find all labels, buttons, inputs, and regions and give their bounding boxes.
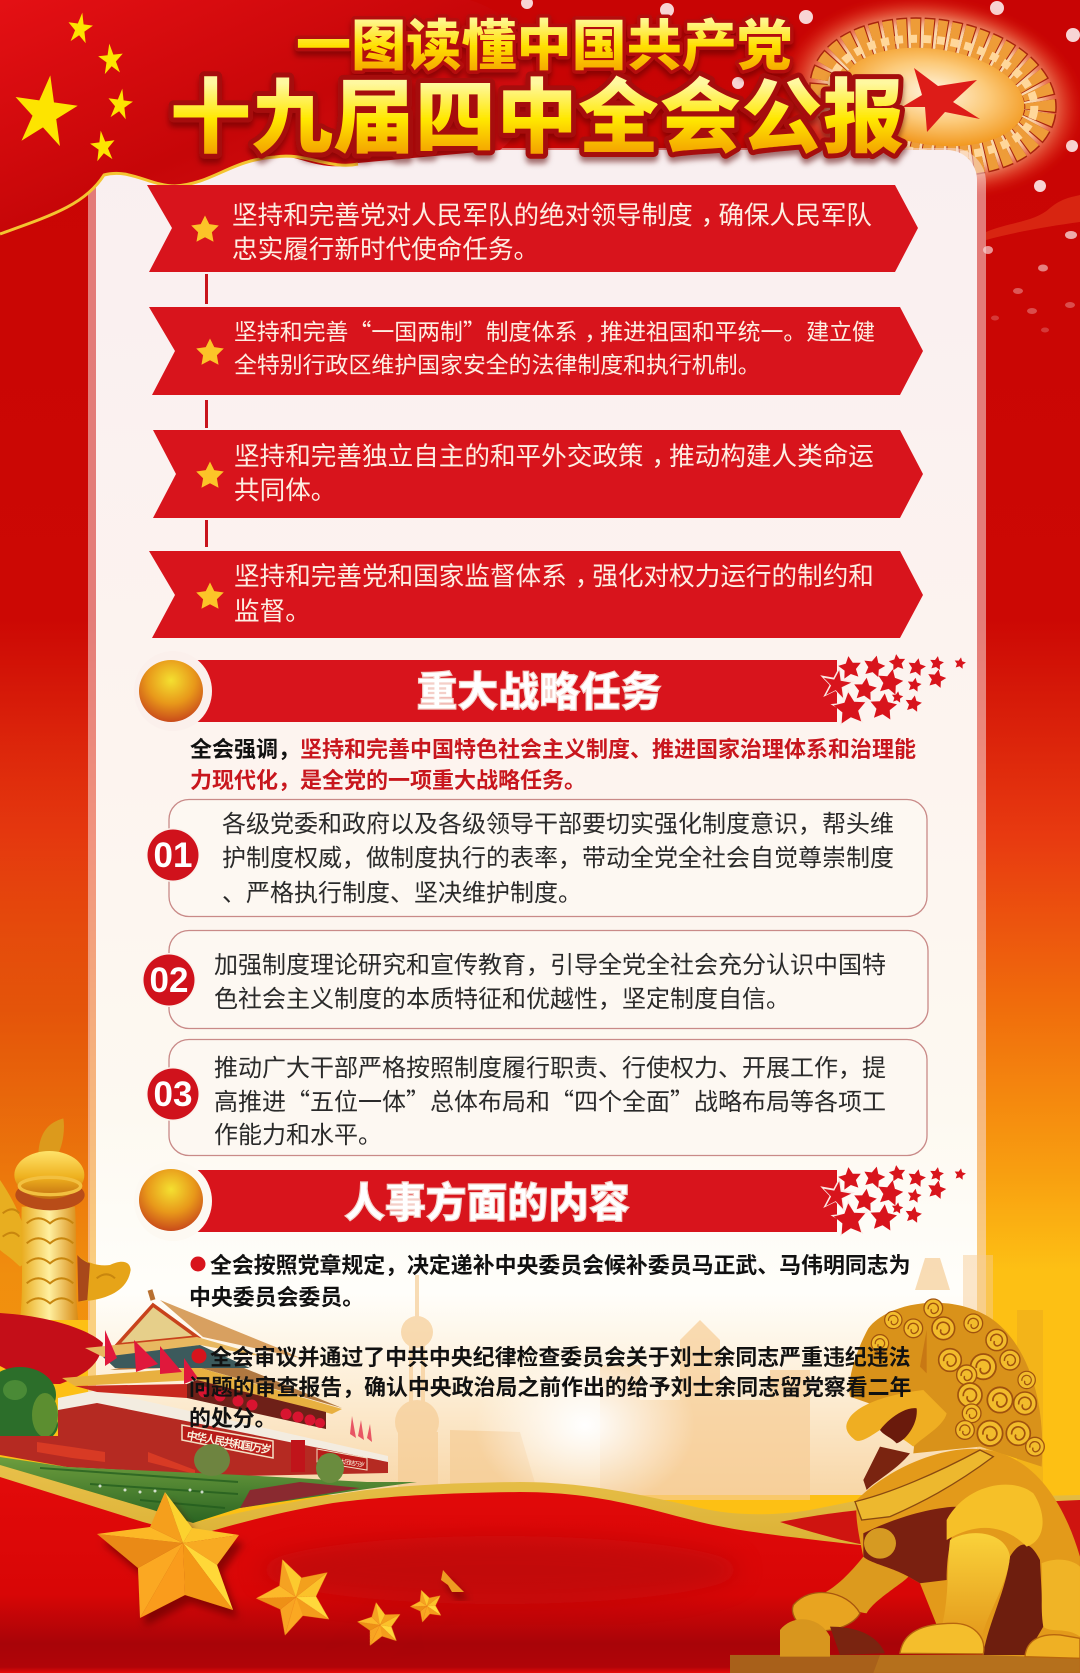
card 02: 02 <box>150 961 188 1000</box>
trees <box>0 1367 58 1447</box>
title line 2: 十九届四中全会公报 <box>170 74 904 164</box>
intro text: 全会强调，坚持和完善中国特色社会主义制度、推进国家治理体系和治理能 <box>190 737 916 762</box>
red drape <box>0 1313 103 1384</box>
ribbon 2: 坚持和完善“一国两制”制度体系 ，推进祖国和平统一。建立健 <box>234 313 875 347</box>
card 02: 色社会主义制度的本质特征和优越性，坚定制度自信。 <box>214 986 790 1013</box>
section header: personnel <box>134 1161 967 1241</box>
card 01: 、严格执行制度、坚决维护制度。 <box>222 880 582 907</box>
bullet paragraph 1: 全会按照党章规定，决定递补中央委员会候补委员马正武、马伟明同志为 <box>210 1253 911 1278</box>
hedge and flowers <box>0 1444 417 1523</box>
emblem: gold ring with red star <box>771 0 1080 215</box>
card 01: 护制度权威，做制度执行的表率，带动全党全社会自觉尊崇制度 <box>222 845 894 872</box>
stone lion <box>730 1299 1080 1673</box>
ribbon 3 <box>153 430 923 518</box>
card 03 <box>146 1040 927 1156</box>
ribbon 4: 监督。 <box>234 597 311 626</box>
connector lines <box>205 274 208 547</box>
left side shading <box>0 700 90 1320</box>
panel: main white card <box>88 148 986 1495</box>
ribbon 2: 全特别行政区维护国家安全的法律制度和执行机制。 <box>234 352 760 378</box>
ribbon 1: 坚持和完善党对人民军队的绝对领导制度 ，确保人民军队 <box>232 201 872 230</box>
ribbon 1: 忠实履行新时代使命任务。 <box>232 235 539 264</box>
sun glow <box>475 1340 695 1510</box>
tiananmen gate <box>0 1290 388 1476</box>
intro text <box>190 737 916 793</box>
tiananmen gate: 世界人民大团结万岁 <box>320 1454 365 1469</box>
card 03: 推动广大干部严格按照制度履行职责、行使权力、开展工作，提 <box>214 1055 886 1082</box>
ribbon 2 <box>149 307 923 395</box>
card 03: 03 <box>154 1075 192 1114</box>
ribbon 3: 坚持和完善独立自主的和平外交政策 ，推动构建人类命运 <box>234 442 874 471</box>
skyline silhouette <box>395 1255 1043 1515</box>
section header: major strategic task <box>134 651 967 731</box>
ribbon 4: 坚持和完善党和国家监督体系 ，强化对权力运行的制约和 <box>234 562 874 591</box>
card 03: 高推进“五位一体”总体布局和“四个全面”战略布局等各项工 <box>214 1082 886 1117</box>
section header: major strategic task: 重大战略任务 <box>417 669 661 715</box>
bullet paragraph 1 <box>189 1253 911 1310</box>
card 02 <box>142 930 928 1028</box>
bullet paragraph 2 <box>189 1345 912 1431</box>
huabiao column <box>0 1118 131 1320</box>
card 03: 作能力和水平。 <box>214 1122 382 1149</box>
gold stars <box>97 1492 464 1647</box>
decorative bokeh dots <box>521 0 1080 332</box>
bullet paragraph 2: 全会审议并通过了中共中央纪律检查委员会关于刘士余同志严重违纪违法 <box>210 1345 911 1370</box>
title line 1: 一图读懂中国共产党 <box>296 15 792 77</box>
card 01: 各级党委和政府以及各级领导干部要切实强化制度意识，帮头维 <box>222 811 894 838</box>
bullet paragraph 1: 中央委员会委员。 <box>189 1285 364 1310</box>
right side cloud <box>986 195 1080 240</box>
bullet paragraph 2: 的处分。 <box>189 1406 277 1431</box>
card 01 <box>146 800 927 916</box>
tiananmen gate: 中华人民共和国万岁 <box>185 1428 273 1457</box>
section header: personnel: 人事方面的内容 <box>344 1180 630 1226</box>
intro text: 力现代化，是全党的一项重大战略任务。 <box>190 768 586 793</box>
card 02: 加强制度理论研究和宣传教育，引导全党全社会充分认识中国特 <box>214 952 886 979</box>
bottom red wave <box>0 1465 1080 1673</box>
bullet paragraph 2: 问题的审查报告，确认中央政治局之前作出的给予刘士余同志留党察看二年 <box>189 1375 912 1400</box>
card 01: 01 <box>154 836 192 875</box>
ribbon 3: 共同体。 <box>234 476 336 505</box>
ribbon 4 <box>149 551 923 638</box>
ribbon 1 <box>147 185 918 272</box>
flag: waving red flag with gold edge <box>0 0 534 236</box>
flag stars <box>10 11 135 162</box>
